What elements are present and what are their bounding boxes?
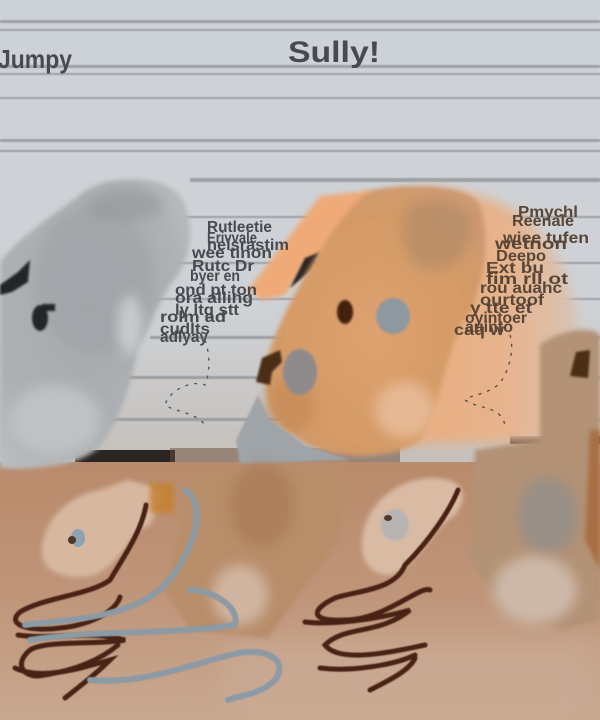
second dog at right edge bbox=[470, 330, 600, 630]
head bbox=[265, 186, 485, 456]
wooden toy right bbox=[362, 478, 463, 575]
dashed arrow left bbox=[165, 340, 209, 425]
heading right: Sully! bbox=[288, 36, 380, 69]
text block right: y tte et bbox=[470, 300, 533, 317]
heading left: Jumpy bbox=[0, 44, 72, 74]
plush: grey koala bbox=[0, 179, 190, 469]
brown cords left bbox=[15, 505, 146, 698]
text block right: Reenale bbox=[512, 213, 574, 230]
text block left: rolm ad bbox=[160, 309, 226, 326]
text block left: byer en bbox=[190, 268, 240, 285]
text block left: ora alling bbox=[175, 290, 253, 307]
text block right: wiee tufen bbox=[502, 230, 589, 247]
text block right: ourtoof bbox=[480, 292, 545, 309]
text block right: wetnon bbox=[494, 236, 567, 253]
plush: brown dog bbox=[165, 186, 600, 638]
text block left: Erivvale bbox=[207, 230, 257, 247]
text block left bbox=[160, 219, 289, 346]
ear bbox=[248, 190, 372, 300]
dog body on floor bbox=[165, 462, 345, 638]
wooden toy left bbox=[42, 480, 174, 577]
floor bbox=[0, 436, 600, 720]
text block right: rou auahc bbox=[480, 280, 562, 297]
text block right: caq w bbox=[454, 322, 505, 339]
text block left: adlyay bbox=[160, 329, 208, 346]
text block left: cudlts bbox=[160, 321, 210, 338]
peach glow to the right of head bbox=[380, 190, 579, 444]
dog eyes bbox=[256, 298, 410, 395]
wall background bbox=[0, 0, 600, 470]
koala arm under dog bbox=[236, 395, 350, 464]
text block right bbox=[454, 204, 589, 339]
dashed arrow right bbox=[465, 335, 512, 425]
text block right: fim rll ot bbox=[486, 271, 569, 288]
text block right: oyintoer bbox=[465, 310, 527, 327]
text block left: Rutc Dr bbox=[192, 258, 254, 275]
text block right: Ext bu bbox=[486, 260, 544, 277]
text block left: neisrastim bbox=[207, 237, 289, 254]
text block right: Deepo bbox=[496, 248, 546, 265]
brown cords right bbox=[305, 490, 458, 690]
blue-grey cords left bbox=[25, 490, 279, 700]
text block left: wee tinon bbox=[191, 245, 272, 262]
text block right: Pmychl bbox=[518, 204, 578, 221]
text block right: auinto bbox=[465, 319, 513, 336]
text block left: ond pt ton bbox=[175, 282, 257, 299]
koala eyes and nose bbox=[0, 260, 55, 331]
text block left: ly ltg stt bbox=[175, 302, 240, 319]
text block left: Rutleetie bbox=[207, 219, 272, 236]
